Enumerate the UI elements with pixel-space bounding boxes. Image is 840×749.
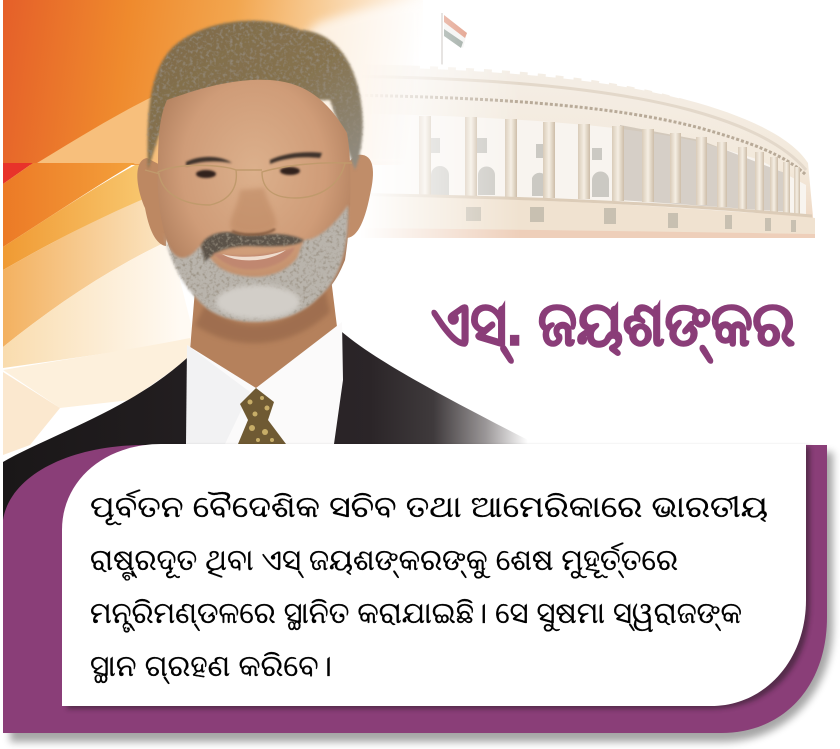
eyes	[196, 170, 216, 178]
plinth	[402, 197, 815, 234]
background: orange swoosh panel	[3, 0, 840, 520]
nose	[230, 188, 276, 235]
mouth	[213, 247, 295, 269]
text block: body copy: ସ୍ଥାନ ଗ୍ରହଣ କରିବେ।	[90, 650, 332, 684]
suit	[3, 332, 528, 540]
ears	[137, 158, 170, 246]
shirt collar	[187, 322, 343, 444]
columns	[419, 116, 800, 214]
neck	[190, 270, 338, 392]
tie	[238, 388, 286, 444]
portrait: S. Jaishankar	[3, 21, 528, 540]
building body	[406, 66, 813, 218]
panel: white text card	[62, 444, 810, 709]
hair	[148, 21, 363, 170]
glasses	[145, 163, 352, 205]
text block: body copy: ମନ୍ତ୍ରିମଣ୍ଡଳରେ ସ୍ଥାନିତ କରାଯାଇଛି। ସେ ସୁଷମା ସ୍ୱରାଜଙ୍କ	[90, 597, 742, 633]
panel: purple card backing	[3, 445, 833, 742]
flag	[441, 13, 467, 64]
text block: body copy: ରାଷ୍ଟ୍ରଦୂତ ଥିବା ଏସ୍ ଜୟଶଙ୍କରଙ୍କୁ ଶେଷ ମୁହୂର୍ତ୍ତରେ	[90, 543, 678, 581]
text block: body copy: ପୂର୍ବତନ ବୈଦେଶିକ ସଚିବ ତଥା ଆମେରିକାରେ ଭାରତୀୟ	[90, 490, 768, 526]
text block: body copy	[90, 490, 768, 684]
windows	[430, 138, 609, 197]
illustration: Parliament building with flag	[340, 13, 815, 238]
beard	[163, 205, 348, 322]
eyebrows	[186, 157, 232, 166]
face	[158, 80, 351, 318]
title: name: ଏସ୍. ଜୟଶଙ୍କର	[431, 290, 795, 363]
